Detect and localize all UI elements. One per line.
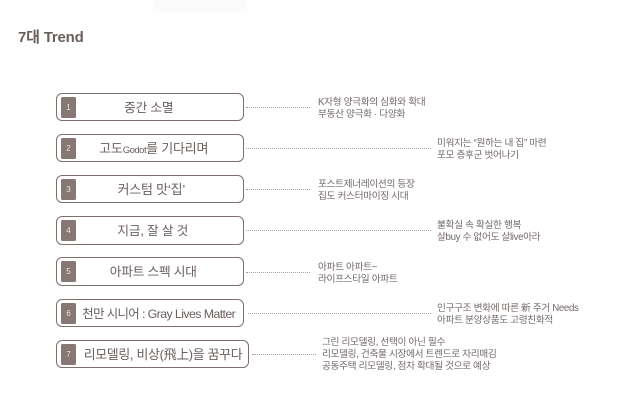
- number 1: [61, 97, 76, 118]
- number 2: 2: [66, 144, 71, 153]
- number 4: 4: [66, 226, 71, 235]
- description 7: [322, 336, 496, 372]
- number 1: 1: [66, 103, 71, 112]
- number 7: 7: [66, 350, 71, 359]
- description 7: 공동주택 리모델링, 점차 확대될 것으로 예상: [322, 361, 490, 372]
- description 3: 집도 커스터마이징 시대: [318, 191, 408, 202]
- connector 4: [246, 230, 431, 231]
- trend 7 box: [56, 340, 248, 368]
- faint top decoration: [153, 0, 247, 12]
- number 3: [61, 179, 76, 200]
- number 3: 3: [66, 185, 71, 194]
- connector 5: [246, 272, 310, 273]
- label 3: 커스텀 맛‘집’: [117, 182, 185, 197]
- number 6: 6: [66, 309, 71, 318]
- description 7: 리모델링, 건축물 시장에서 트렌드로 자리매김: [322, 349, 496, 360]
- title: 7대 Trend: [18, 29, 84, 46]
- label 2: 고도Godot를 기다리며: [99, 141, 208, 156]
- description 1: K자형 양극화의 심화와 확대: [318, 97, 425, 108]
- label 1: 중간 소멸: [124, 101, 173, 115]
- description 6: 아파트 분양상품도 고령친화적: [437, 315, 553, 326]
- description 2: 포모 층후군 벗어나기: [437, 150, 519, 161]
- description 6: 인구구조 변화에 따른 新 주거 Needs: [437, 303, 578, 314]
- description 2: [437, 138, 546, 161]
- trend 4 box: [56, 216, 244, 245]
- label 7: 리모델링, 비상(飛上)을 꿈꾸다: [84, 347, 242, 362]
- description 5: [318, 262, 398, 285]
- number 2: [61, 138, 76, 159]
- number 4: [61, 220, 76, 241]
- description 1: 부동산 양극화 · 다양화: [318, 109, 405, 120]
- number 5: 5: [66, 267, 71, 276]
- connector 2: [246, 148, 431, 149]
- connector 6: [248, 313, 431, 314]
- description 7: 그린 리모델링, 선택이 아닌 필수: [322, 337, 445, 348]
- description 5: 라이프스타일 아파트: [318, 274, 397, 285]
- description 3: 포스트제너레이션의 등장: [318, 179, 415, 190]
- label 5: 아파트 스펙 시대: [110, 265, 197, 279]
- description 6: [437, 302, 578, 326]
- description 5: 아파트 아파트~: [318, 262, 377, 273]
- description 1: [318, 96, 425, 120]
- trend 1 box: [56, 93, 244, 121]
- number 7: [61, 344, 76, 365]
- trend 5 box: [56, 257, 244, 286]
- connector 7: [252, 354, 316, 355]
- number 5: [61, 261, 76, 282]
- connector 1: [246, 106, 310, 108]
- description 4: 불확실 속 확실한 행복: [437, 220, 521, 231]
- description 4: 살buy 수 없어도 살live아라: [437, 232, 540, 243]
- label 4: 지금, 잘 살 것: [117, 224, 188, 238]
- description 4: [437, 220, 540, 243]
- trend 3 box: [56, 175, 244, 203]
- description 3: [318, 178, 415, 202]
- connector 3: [246, 188, 310, 190]
- description 2: 미워지는 “원하는 내 집” 마련: [437, 138, 546, 149]
- number 6: [61, 303, 76, 324]
- trend 6 box: [56, 298, 244, 327]
- label 6: 천만 시니어 : Gray Lives Matter: [82, 306, 235, 320]
- trend 2 box: [56, 134, 244, 162]
